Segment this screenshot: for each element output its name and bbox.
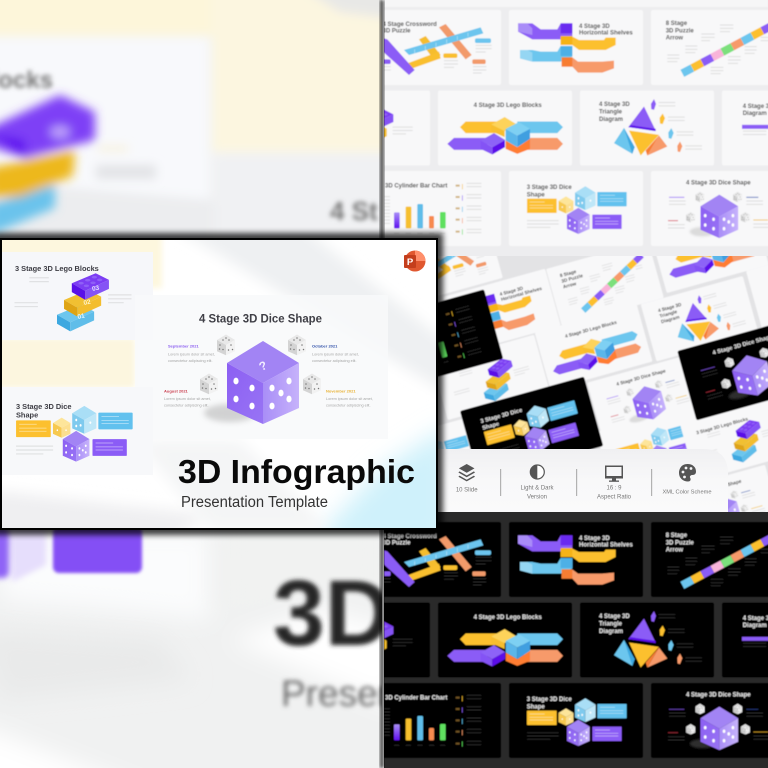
light slides grid	[384, 0, 768, 256]
dark slide: 4 stage dice	[651, 683, 768, 758]
slide: crossword: 3D Puzzle	[382, 29, 411, 35]
label: light and dark version: Light & Dark	[520, 486, 555, 492]
tilted slides collage	[438, 256, 768, 512]
tilted dark slide: 3 stage dice: Shape	[482, 421, 500, 432]
label: light and dark version: Version	[527, 494, 547, 500]
label: XML color scheme: XML Color Scheme	[662, 489, 712, 495]
icon: layers	[458, 464, 475, 481]
slide: crossword	[384, 10, 500, 84]
dark slide: bars	[367, 683, 501, 758]
blurred headline fragment: 3D	[273, 561, 392, 665]
slide: horizontal shelves	[509, 10, 643, 85]
slide: 3 stage lego	[384, 91, 430, 165]
label: September 2021: consectetur adipiscing elit.	[168, 359, 213, 363]
dark slide: crossword	[367, 522, 501, 597]
dark slide: 4 stage lego: 4 Stage 3D Lego Blocks	[474, 615, 542, 621]
slide: triangle: 4 Stage 3D	[599, 102, 630, 108]
label: aspect ratio	[597, 486, 632, 500]
slide: 3 stage dice: Shape	[527, 192, 545, 198]
slide: 4 stage dice	[651, 171, 768, 246]
large dice: ?	[257, 358, 269, 374]
dark slide: 4 stage dice: 4 Stage 3D Dice Shape	[686, 693, 751, 699]
tilted dark slide: 4 stage dice	[677, 317, 768, 420]
dark slide: 3 stage dice: 3 Stage 3D Dice	[527, 697, 572, 703]
tilted slide: 4 stage dice: 4 Stage 3D Dice Shape	[616, 368, 667, 388]
tilted slide: 4 stage lego	[535, 304, 653, 390]
blurred lego blocks	[0, 95, 156, 235]
label: aspect ratio: 16 : 9	[606, 486, 622, 492]
tilted slide: 3 stage lego	[432, 335, 550, 420]
label: October 2021	[312, 344, 359, 363]
label: November 2021	[326, 388, 373, 408]
tilted dark slide: bars	[438, 289, 504, 378]
label: October 2021: October 2021	[312, 344, 338, 348]
label: September 2021: Lorem ipsum dolor sit amet,	[168, 352, 215, 356]
label: 03: 03	[91, 285, 100, 293]
dark slide: arrow: 8 Stage	[666, 533, 688, 539]
label: October 2021: consectetur adipiscing elit.	[312, 359, 357, 363]
tilted slide: arrow: 8 Stage	[559, 269, 577, 279]
slide: puzzle arrow: 8 Stage	[666, 21, 688, 27]
label: 10 Slide: 10 Slide	[456, 488, 478, 494]
dark slide: arrow: 3D Puzzle	[666, 540, 694, 546]
heading: 3 Stage 3D Dice Shape: 3 Stage 3D Dice	[16, 402, 71, 411]
small dice: top left	[217, 334, 235, 355]
tilted slide: triangle	[641, 276, 759, 361]
tilted slide: shelves: 4 Stage 3D	[499, 285, 524, 298]
label: September 2021	[168, 344, 215, 363]
tilted slide: 4 stage dice bottom right: 4 Stage 3D Dice Shape	[692, 478, 743, 498]
icon: palette	[679, 464, 696, 482]
slide: diagram: Diagram	[743, 111, 767, 117]
tilted slide: triangle: 4 Stage 3D	[657, 302, 683, 314]
dark slide: shelves	[509, 522, 643, 597]
heading second line: Shape	[16, 410, 38, 420]
dark slides grid	[296, 506, 768, 768]
label: 01: 01	[77, 313, 86, 321]
features info bar	[438, 449, 728, 512]
panel: 3 stage lego slide	[2, 252, 153, 340]
label: October 2021: Lorem ipsum dolor sit amet,	[312, 352, 359, 356]
label: August 2021: Lorem ipsum dolor sit amet,	[164, 397, 211, 401]
tilted slide: 3 stage lego lower right	[680, 400, 768, 472]
dark slide: triangle	[580, 602, 714, 678]
slide: triangle: Diagram	[599, 117, 623, 123]
tilted slide: shelves	[444, 269, 560, 344]
panel: 3 stage dice slide	[2, 387, 153, 475]
tilted slide: 3 stage dice lower left	[438, 419, 472, 449]
tilted dark slide: 3 stage dice	[460, 376, 604, 449]
slide: cylinder bars	[385, 172, 500, 246]
tilted slide: crossword	[438, 256, 502, 294]
tilted slide: 4 stage dice bottom right	[728, 465, 768, 512]
label: 02: 02	[83, 299, 92, 307]
dark slide: 3 stage dice: Shape	[527, 704, 545, 710]
label: September 2021: September 2021	[168, 344, 199, 348]
dark slide: arrow: Arrow	[666, 548, 683, 554]
tilted slide: shelves: Horizontal Shelves	[500, 286, 543, 303]
label: November 2021: Lorem ipsum dolor sit amet,	[326, 397, 373, 401]
small dice: lower left	[200, 374, 218, 394]
dark slide: arrow	[651, 522, 768, 597]
icon: light and dark half circle	[530, 465, 544, 479]
slide: triangle	[580, 90, 714, 166]
blurred subtitle fragment: Presentation	[281, 673, 489, 714]
label: August 2021: consectetur adipiscing elit.	[164, 404, 209, 408]
slide: 3 stage dice: 3 Stage 3D Dice	[527, 185, 572, 191]
dark slide: triangle: Triangle	[599, 622, 623, 628]
dark slide: crossword: 4 Stage Crossword	[382, 534, 437, 540]
label: August 2021	[164, 388, 211, 408]
tilted slide: 4 stage lego: 4 Stage 3D Lego Blocks	[564, 320, 618, 340]
slide: horizontal shelves: 4 Stage 3D	[579, 24, 610, 30]
tilted slide: triangle: Triangle	[659, 309, 678, 320]
panel: 4 stage dice slide	[135, 295, 388, 439]
dice shadow	[204, 404, 256, 422]
dark slide: shelves: 4 Stage 3D	[579, 536, 610, 542]
dark slide: triangle: 4 Stage 3D	[599, 614, 630, 620]
slide: 4 stage lego	[438, 90, 572, 166]
tilted slide: 3 stage dice lower centre	[598, 414, 698, 449]
dark slide: diagram	[722, 602, 768, 678]
tilted dark slide: 3 stage dice: 3 Stage 3D Dice	[480, 408, 523, 425]
slide: cylinder bars: 3D Cylinder Bar Chart	[385, 184, 447, 190]
dark slide: 4 stage lego	[438, 602, 572, 678]
tilted slide: arrow: 3D Puzzle	[561, 273, 584, 285]
small dice: top right	[288, 334, 306, 355]
slide: 4 stage lego: 4 Stage 3D Lego Blocks	[474, 103, 542, 109]
slide: 4 stage dice: 4 Stage 3D Dice Shape	[686, 181, 751, 187]
dark slide: crossword: 3D Puzzle	[382, 541, 411, 547]
dark slide: bars: 3D Cylinder Bar Chart	[385, 696, 447, 702]
icon: monitor	[605, 466, 623, 482]
label: August 2021: August 2021	[164, 388, 189, 394]
tilted slide: far right	[746, 265, 768, 328]
blurred lower background	[0, 526, 400, 768]
slide: crossword: 4 Stage Crossword	[382, 22, 437, 28]
subtitle: Presentation Template: Presentation Template	[181, 494, 328, 511]
slide: puzzle arrow: Arrow	[666, 36, 683, 42]
dark slide: triangle: Diagram	[599, 629, 623, 635]
heading: 3 Stage 3D Lego Blocks: 3 Stage 3D Lego Blocks	[15, 264, 99, 273]
dark slide: 3 stage dice	[509, 683, 643, 758]
icon: PowerPoint logo: P	[407, 257, 414, 268]
slide: diagram	[722, 90, 768, 166]
label: November 2021: consectetur adipiscing elit.	[326, 404, 371, 408]
dark slide: 3 stage lego	[296, 602, 430, 678]
tilted slide: arrow	[546, 256, 664, 325]
tilted slide: arrow: Arrow	[562, 281, 577, 290]
tilted slide: 3 stage lego lower right: 3 Stage 3D Lego Blocks	[696, 416, 749, 436]
small dice: lower right	[303, 374, 321, 394]
slide: 3 stage dice	[509, 171, 643, 246]
heading: 4 Stage 3D Dice Shape: 4 Stage 3D Dice Shape	[199, 314, 322, 326]
icon: PowerPoint logo	[404, 250, 426, 272]
slide: triangle: Triangle	[599, 110, 623, 116]
headline: 3D Infographic: 3D Infographic	[178, 453, 415, 490]
tilted slide: 4 stage dice	[588, 358, 692, 430]
dark slide: diagram: Diagram	[743, 623, 767, 629]
dark slide: shelves: Horizontal Shelves	[579, 543, 633, 549]
tilted slide: triangle: Diagram	[660, 314, 680, 325]
label: light and dark version	[521, 485, 554, 498]
label: aspect ratio: Aspect Ratio	[597, 494, 632, 500]
slide: horizontal shelves: Horizontal Shelves	[579, 31, 633, 37]
blurred background: enlarged preview	[0, 0, 382, 768]
blurred slide title fragment: 4 St	[330, 196, 378, 226]
slide: puzzle arrow: 3D Puzzle	[666, 28, 694, 34]
label: November 2021: November 2021	[326, 388, 356, 394]
large dice	[227, 341, 299, 424]
slide: puzzle arrow	[651, 10, 768, 85]
tilted slide: upper right	[656, 256, 768, 293]
main preview card	[0, 225, 450, 545]
